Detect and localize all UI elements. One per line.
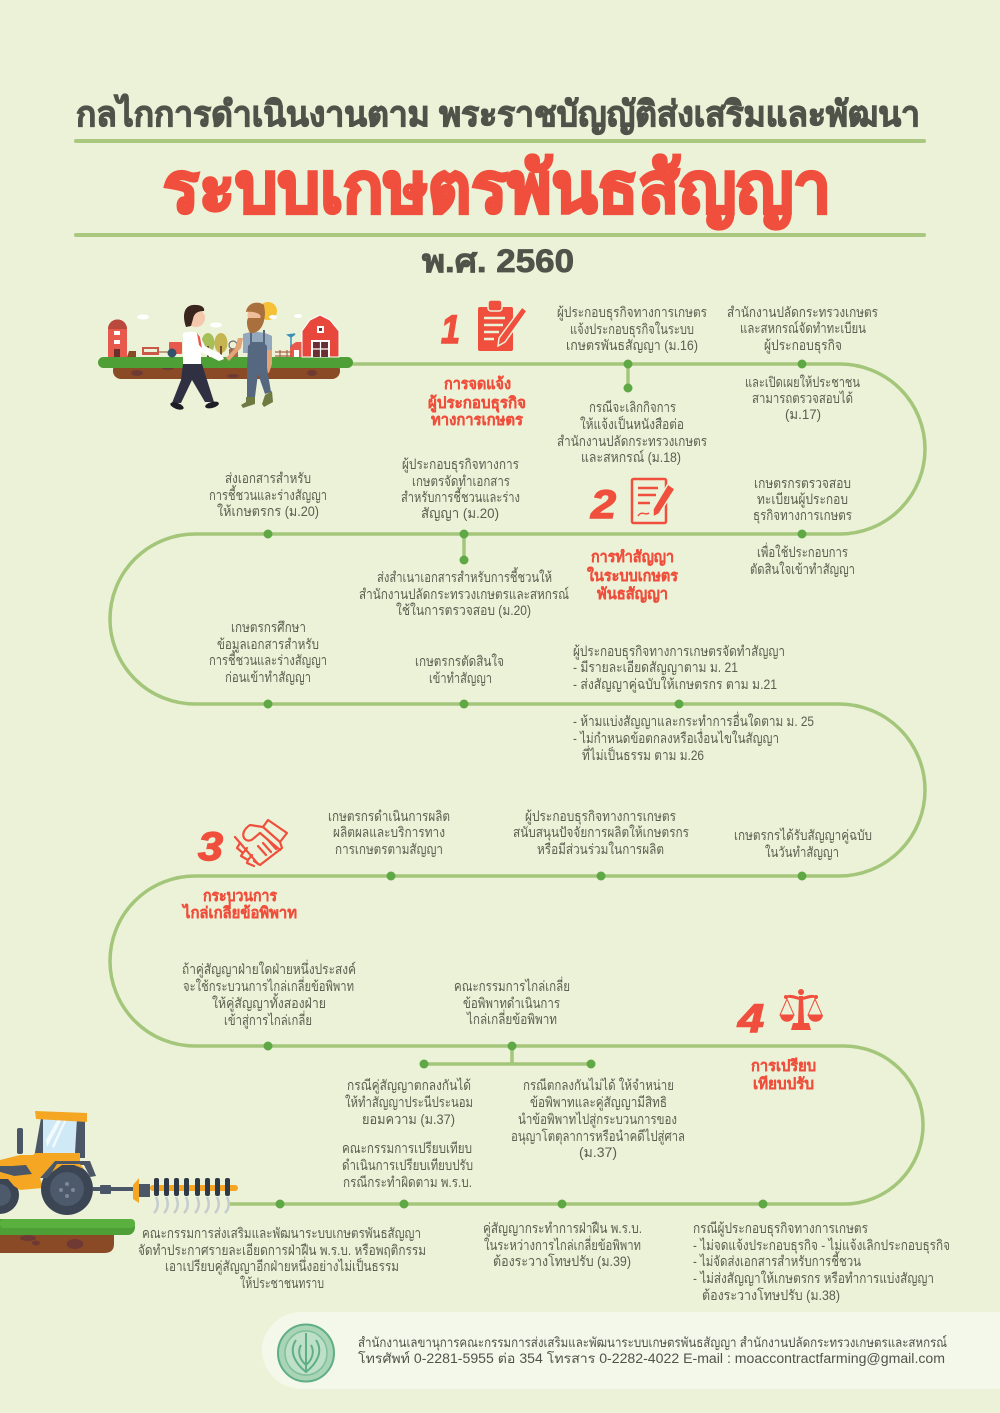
text: farmer receives copy: ในวันทำสัญญา [765, 844, 839, 860]
text: prepare documents: เกษตรจัดทำเอกสาร [412, 473, 510, 489]
illustration: tractor [0, 1111, 238, 1253]
illustration: farm scene with handshake [98, 302, 353, 411]
text: operator supports production [513, 808, 689, 857]
text: farmers produce: การเกษตรตามสัญญา [335, 841, 443, 857]
text: agreement reached: ให้ทำสัญญาประนีประนอม [345, 1094, 473, 1110]
step 4: number: 4 [737, 997, 764, 1041]
text: no agreement: (ม.37) [579, 1144, 617, 1160]
text: farmers produce: เกษตรกรดำเนินการผลิต [328, 808, 450, 824]
text: mediation option: เข้าสู่การไกล่เกลี่ย [224, 1011, 312, 1029]
text: operator violation penalty: - ไม่จดแจ้งประกอบธุรกิจ - ไม่แจ้งเลิกประกอบธุรกิจ [693, 1237, 950, 1254]
text: farmer receives copy: เกษตรกรได้รับสัญญาคู่ฉบับ [734, 827, 872, 844]
text: operator makes contract: ผู้ประกอบธุรกิจทางการเกษตรจัดทำสัญญา [573, 643, 785, 660]
text: party violation penalty: ในระหว่างการไกล่เกลี่ยข้อพิพาท [484, 1236, 641, 1253]
text: mediation committee: ไกล่เกลี่ยข้อพิพาท [466, 1010, 557, 1027]
footer contact text: โทรศัพท์ 0-2281-5955 ต่อ 354 โทรสาร 0-2282-4022 E-mail : moaccontractfarming@gmail.com [358, 1350, 945, 1366]
text: party violation penalty: ต้องระวางโทษปรับ (ม.39) [493, 1253, 631, 1269]
text: send documents [209, 470, 327, 519]
timeline branches and dots [264, 360, 806, 1208]
text: mediation option: จะใช้กระบวนการไกล่เกลี่ยข้อพิพาท [183, 977, 354, 994]
text: violation announcement: เอาเปรียบคู่สัญญาอีกฝ่ายหนึ่งอย่างไม่เป็นธรรม [165, 1257, 399, 1275]
text: operator supports production: สนับสนุนปัจจัยการผลิตให้เกษตรกร [513, 824, 689, 841]
text: farmers check register: ธุรกิจทางการเกษตร [753, 507, 852, 524]
text: decision purpose: ตัดสินใจเข้าทำสัญญา [750, 561, 855, 577]
text: public disclosure: และเปิดเผยให้ประชาชน [745, 374, 860, 390]
text: operator makes contract: - ส่งสัญญาคู่ฉบับให้เกษตรกร ตาม ม.21 [573, 676, 777, 693]
step 1: heading [428, 375, 526, 429]
step 3: heading: ไกล่เกลี่ยข้อพิพาท [181, 901, 297, 922]
step 2: heading: พันธสัญญา [597, 586, 668, 603]
text: mediation committee [454, 977, 570, 1027]
text: farmers check register: ทะเบียนผู้ประกอบ [757, 491, 848, 508]
text: settlement committee: คณะกรรมการเปรียบเทียบ [342, 1140, 472, 1156]
text: no agreement: กรณีตกลงกันไม่ได้ ให้จำหน่าย [523, 1077, 674, 1093]
step 1: heading: การจดแจ้ง [444, 375, 511, 393]
text: ministry registers: และสหกรณ์จัดทำทะเบียน [740, 320, 866, 336]
text: violation announcement [138, 1225, 426, 1291]
text: mediation option: ให้คู่สัญญาทั้งสองฝ่าย [212, 993, 326, 1012]
text: violation announcement: คณะกรรมการส่งเสริมและพัฒนาระบบเกษตรพันธสัญญา [142, 1225, 421, 1241]
text: prepare documents: สำหรับการชี้ชวนและร่าง [401, 487, 520, 505]
text: operator registers: เกษตรพันธสัญญา (ม.16) [566, 337, 698, 353]
text: contract prohibitions: ที่ไม่เป็นธรรม ตาม ม.26 [582, 746, 704, 763]
text: farmers decide: เกษตรกรตัดสินใจ [415, 653, 504, 669]
text: public disclosure: สามารถตรวจสอบได้ [752, 390, 853, 406]
text: decision purpose: เพื่อใช้ประกอบการ [757, 543, 848, 560]
text: farmers check register: เกษตรกรตรวจสอบ [754, 475, 851, 491]
text: ministry registers: สำนักงานปลัดกระทรวงเกษตร [727, 304, 878, 320]
title: year: พ.ศ. 2560 [422, 243, 574, 279]
text: mediation option [182, 960, 356, 1029]
text: prepare documents: สัญญา (ม.20) [421, 505, 499, 521]
step 2: number: 2 [590, 483, 616, 527]
step 1: heading: ผู้ประกอบธุรกิจ [428, 394, 526, 414]
icon: scales of justice [780, 989, 823, 1030]
step 4: heading: เทียบปรับ [753, 1075, 814, 1093]
text: operator registers: แจ้งประกอบธุรกิจในระบบ [570, 321, 694, 338]
text: contract prohibitions [573, 712, 814, 763]
title: top line: กลไกการดำเนินงานตาม พระราชบัญญัติส่งเสริมและพัฒนา [76, 93, 920, 135]
text: farmers check register [753, 475, 852, 524]
step 1: number: 1 [441, 308, 460, 352]
text: cancelling business: ให้แจ้งเป็นหนังสือต่อ [580, 415, 684, 432]
text: no agreement [511, 1077, 685, 1160]
text: party violation penalty [483, 1220, 642, 1269]
text: public disclosure: (ม.17) [785, 406, 821, 422]
text: send documents: ส่งเอกสารสำหรับ [225, 470, 311, 486]
step 2: heading [587, 548, 679, 603]
text: cancelling business [557, 399, 707, 465]
text: settlement committee: ดำเนินการเปรียบเทียบปรับ [342, 1157, 473, 1173]
text: mediation committee: ข้อพิพาทดำเนินการ [463, 995, 560, 1011]
text: agreement reached: ยอมความ (ม.37) [362, 1111, 455, 1127]
footer contact text [358, 1334, 947, 1366]
text: agreement reached [345, 1077, 473, 1127]
text: prepare documents [401, 456, 520, 521]
step 3: number: 3 [198, 825, 223, 869]
text: operator violation penalty: กรณีผู้ประกอบธุรกิจทางการเกษตร [693, 1220, 868, 1237]
text: settlement committee: กรณีกระทำผิดตาม พ.ร.บ. [343, 1174, 472, 1190]
step 1: heading: ทางการเกษตร [431, 412, 524, 429]
icon: handshake [235, 820, 287, 866]
text: party violation penalty: คู่สัญญากระทำการฝ่าฝืน พ.ร.บ. [483, 1220, 642, 1237]
text: operator makes contract [573, 643, 785, 693]
text: no agreement: นำข้อพิพาทไปสู่กระบวนการของ [518, 1111, 677, 1128]
text: farmers study [209, 619, 327, 685]
text: no agreement: อนุญาโตตุลาการหรือนำคดีไปสู่ศาล [511, 1128, 685, 1145]
text: farmers study: การชี้ชวนและร่างสัญญา [209, 650, 327, 668]
footer panel [262, 1312, 1000, 1389]
text: mediation committee: คณะกรรมการไกล่เกลี่ย [454, 977, 570, 994]
step 4: heading [751, 1057, 816, 1093]
text: copy to ministry [359, 567, 569, 618]
text: violation announcement: ให้ประชาชนทราบ [240, 1275, 324, 1291]
text: farmers decide: เข้าทำสัญญา [429, 670, 492, 686]
title: main heading: ระบบเกษตรพันธสัญญา [163, 149, 831, 230]
text: cancelling business: สำนักงานปลัดกระทรวงเกษตร [557, 433, 707, 449]
text: farmers study: ข้อมูลเอกสารสำหรับ [217, 636, 319, 653]
text: copy to ministry: ใช้ในการตรวจสอบ (ม.20) [396, 602, 531, 618]
icon: contract with pen [632, 479, 675, 523]
step 2: heading: ในระบบเกษตร [587, 566, 679, 585]
text: operator registers: ผู้ประกอบธุรกิจทางการเกษตร [557, 304, 707, 321]
timeline path [110, 364, 925, 1204]
text: ministry registers [727, 304, 878, 354]
text: operator violation penalty [693, 1220, 950, 1303]
text: farmers study: เกษตรกรศึกษา [231, 619, 306, 635]
step 2: heading: การทำสัญญา [591, 548, 674, 566]
text: public disclosure [745, 374, 860, 422]
step 4: heading: การเปรียบ [751, 1057, 816, 1075]
text: decision purpose [750, 543, 855, 577]
text: mediation option: ถ้าคู่สัญญาฝ่ายใดฝ่ายหนึ่งประสงค์ [182, 960, 356, 978]
text: operator supports production: หรือมีส่วนร่วมในการผลิต [537, 841, 664, 857]
text: contract prohibitions: - ไม่กำหนดข้อตกลงหรือเงื่อนไขในสัญญา [573, 729, 779, 746]
icon: clipboard with pencil [478, 300, 527, 351]
text: agreement reached: กรณีคู่สัญญาตกลงกันได้ [347, 1077, 471, 1094]
text: send documents: การชี้ชวนและร่างสัญญา [209, 485, 327, 503]
text: no agreement: ข้อพิพาทและคู่สัญญามีสิทธิ [530, 1094, 667, 1111]
text: prepare documents: ผู้ประกอบธุรกิจทางการ [402, 456, 519, 473]
text: contract prohibitions: - ห้ามแบ่งสัญญาและกระทำการอื่นใดตาม ม. 25 [573, 712, 814, 729]
text: operator makes contract: - มีรายละเอียดสัญญาตาม ม. 21 [573, 659, 738, 675]
text: farmers study: ก่อนเข้าทำสัญญา [225, 669, 311, 685]
text: send documents: ให้เกษตรกร (ม.20) [217, 503, 319, 519]
text: farmers decide [415, 653, 504, 686]
text: farmers produce [328, 808, 450, 857]
text: cancelling business: กรณีจะเลิกกิจการ [589, 399, 676, 415]
text: ministry registers: ผู้ประกอบธุรกิจ [764, 337, 842, 354]
text: copy to ministry: สำนักงานปลัดกระทรวงเกษตรและสหกรณ์ [359, 586, 569, 602]
text: violation announcement: จัดทำประกาศรายละเอียดการฝ่าฝืน พ.ร.บ. หรือพฤติกรรม [138, 1242, 426, 1258]
text: farmers produce: ผลิตผลและบริการทาง [333, 824, 445, 840]
text: operator violation penalty: ต้องระวางโทษปรับ (ม.38) [702, 1287, 840, 1303]
text: operator violation penalty: - ไม่จัดส่งเอกสารสำหรับการชี้ชวน [693, 1251, 861, 1269]
text: operator registers [557, 304, 707, 353]
step 3: heading: กระบวนการ [203, 888, 278, 905]
text: cancelling business: และสหกรณ์ (ม.18) [581, 449, 681, 465]
text: operator violation penalty: - ไม่ส่งสัญญาให้เกษตรกร หรือทำการแบ่งสัญญา [693, 1270, 934, 1286]
step 3: heading [181, 888, 297, 922]
text: settlement committee [342, 1140, 473, 1190]
text: farmer receives copy [734, 827, 872, 860]
icon: ministry emblem [278, 1324, 334, 1382]
text: operator supports production: ผู้ประกอบธุรกิจทางการเกษตร [525, 808, 676, 825]
text: copy to ministry: ส่งสำเนาเอกสารสำหรับการชี้ชวนให้ [377, 567, 552, 585]
